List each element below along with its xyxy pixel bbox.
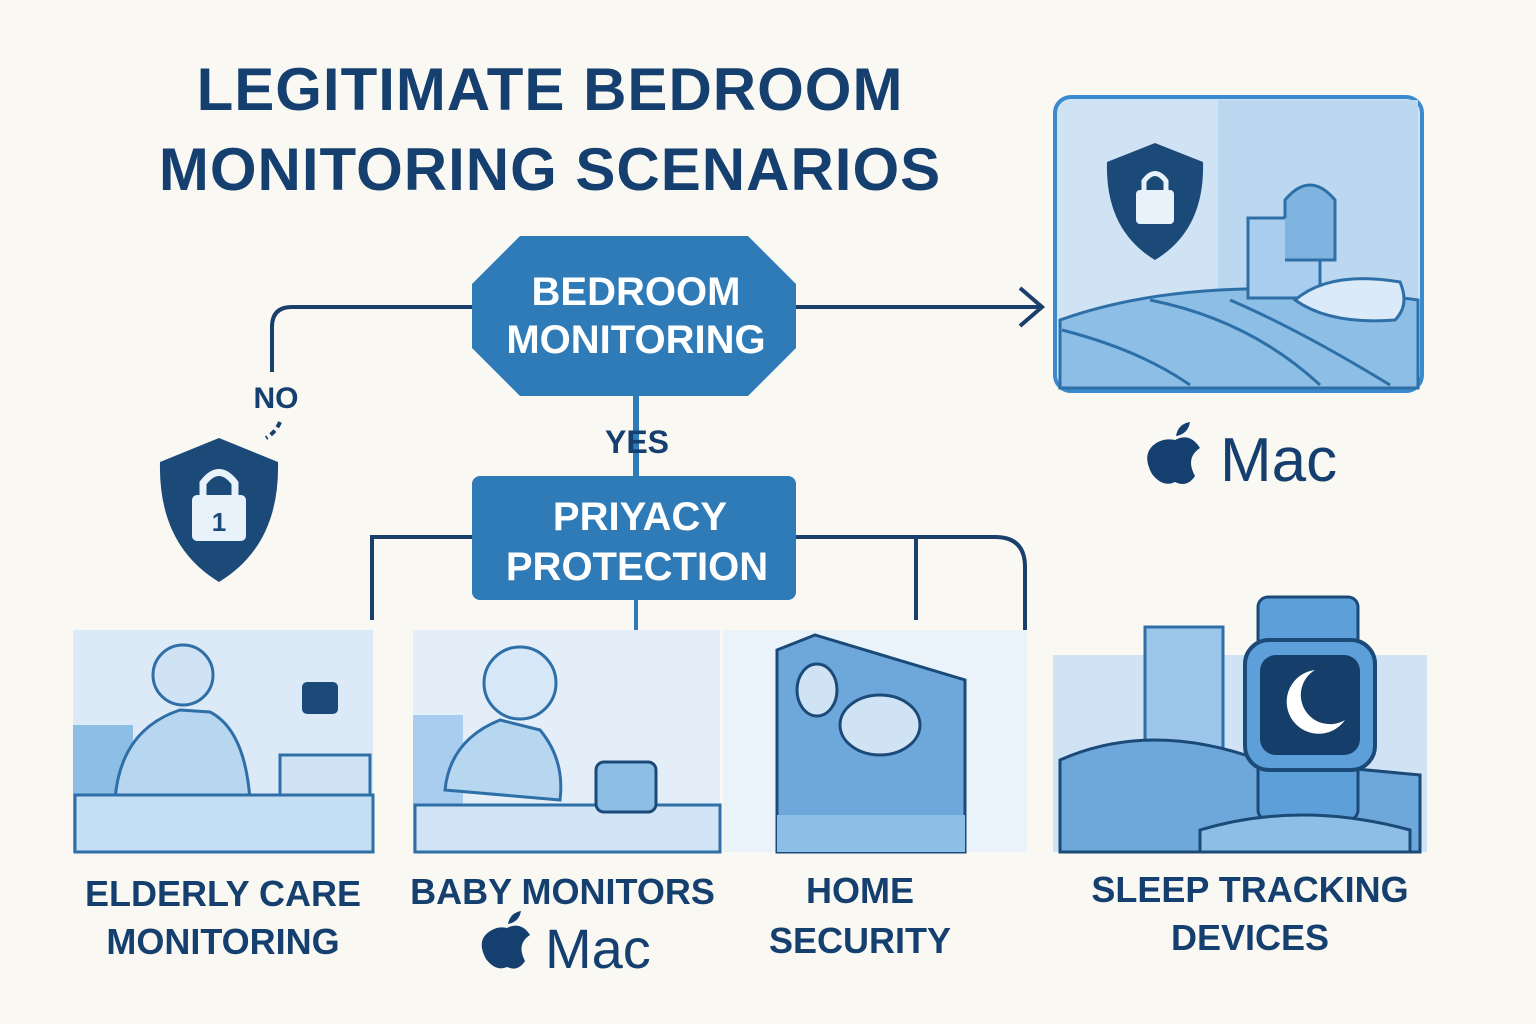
octagon: bedroom monitoring: MONITORING: [506, 318, 766, 362]
panel: sleep tracking: [1053, 597, 1427, 852]
label: elderly care: ELDERLY CARE: [85, 873, 361, 914]
label: elderly care: [85, 873, 361, 962]
logo: mac top right: [1147, 422, 1337, 495]
icon: shield lock: 1: [212, 507, 226, 537]
icon: shield lock: [160, 438, 278, 582]
label: home security: HOME: [806, 870, 914, 911]
logo: mac bottom: Mac: [545, 917, 651, 980]
octagon: bedroom monitoring: BEDROOM: [532, 270, 740, 314]
panel: home security: [723, 630, 1027, 852]
title: MONITORING SCENARIOS: [159, 136, 941, 203]
label: yes: YES: [605, 424, 669, 460]
logo: mac top right: Mac: [1220, 426, 1337, 495]
label: home security: SECURITY: [769, 920, 951, 961]
title: LEGITIMATE BEDROOM: [197, 56, 903, 123]
label: sleep tracking: DEVICES: [1171, 917, 1329, 958]
label: no: NO: [254, 382, 298, 415]
panel: bedroom scene: [1055, 97, 1422, 391]
label: elderly care: MONITORING: [106, 921, 340, 962]
box: privacy protection: PROTECTION: [506, 545, 768, 589]
box: privacy protection: PRIYACY: [553, 495, 727, 539]
box: privacy protection: [472, 476, 796, 600]
panel: baby monitors: [413, 630, 720, 852]
logo: mac bottom: [482, 911, 651, 980]
label: sleep tracking: [1091, 869, 1409, 958]
panel: elderly care: [73, 630, 373, 852]
connector lines: [266, 288, 1042, 850]
label: baby monitors: BABY MONITORS: [410, 871, 715, 912]
title: [159, 56, 941, 203]
label: home security: [769, 870, 951, 961]
label: sleep tracking: SLEEP TRACKING: [1091, 869, 1409, 910]
octagon: bedroom monitoring: [472, 236, 796, 396]
